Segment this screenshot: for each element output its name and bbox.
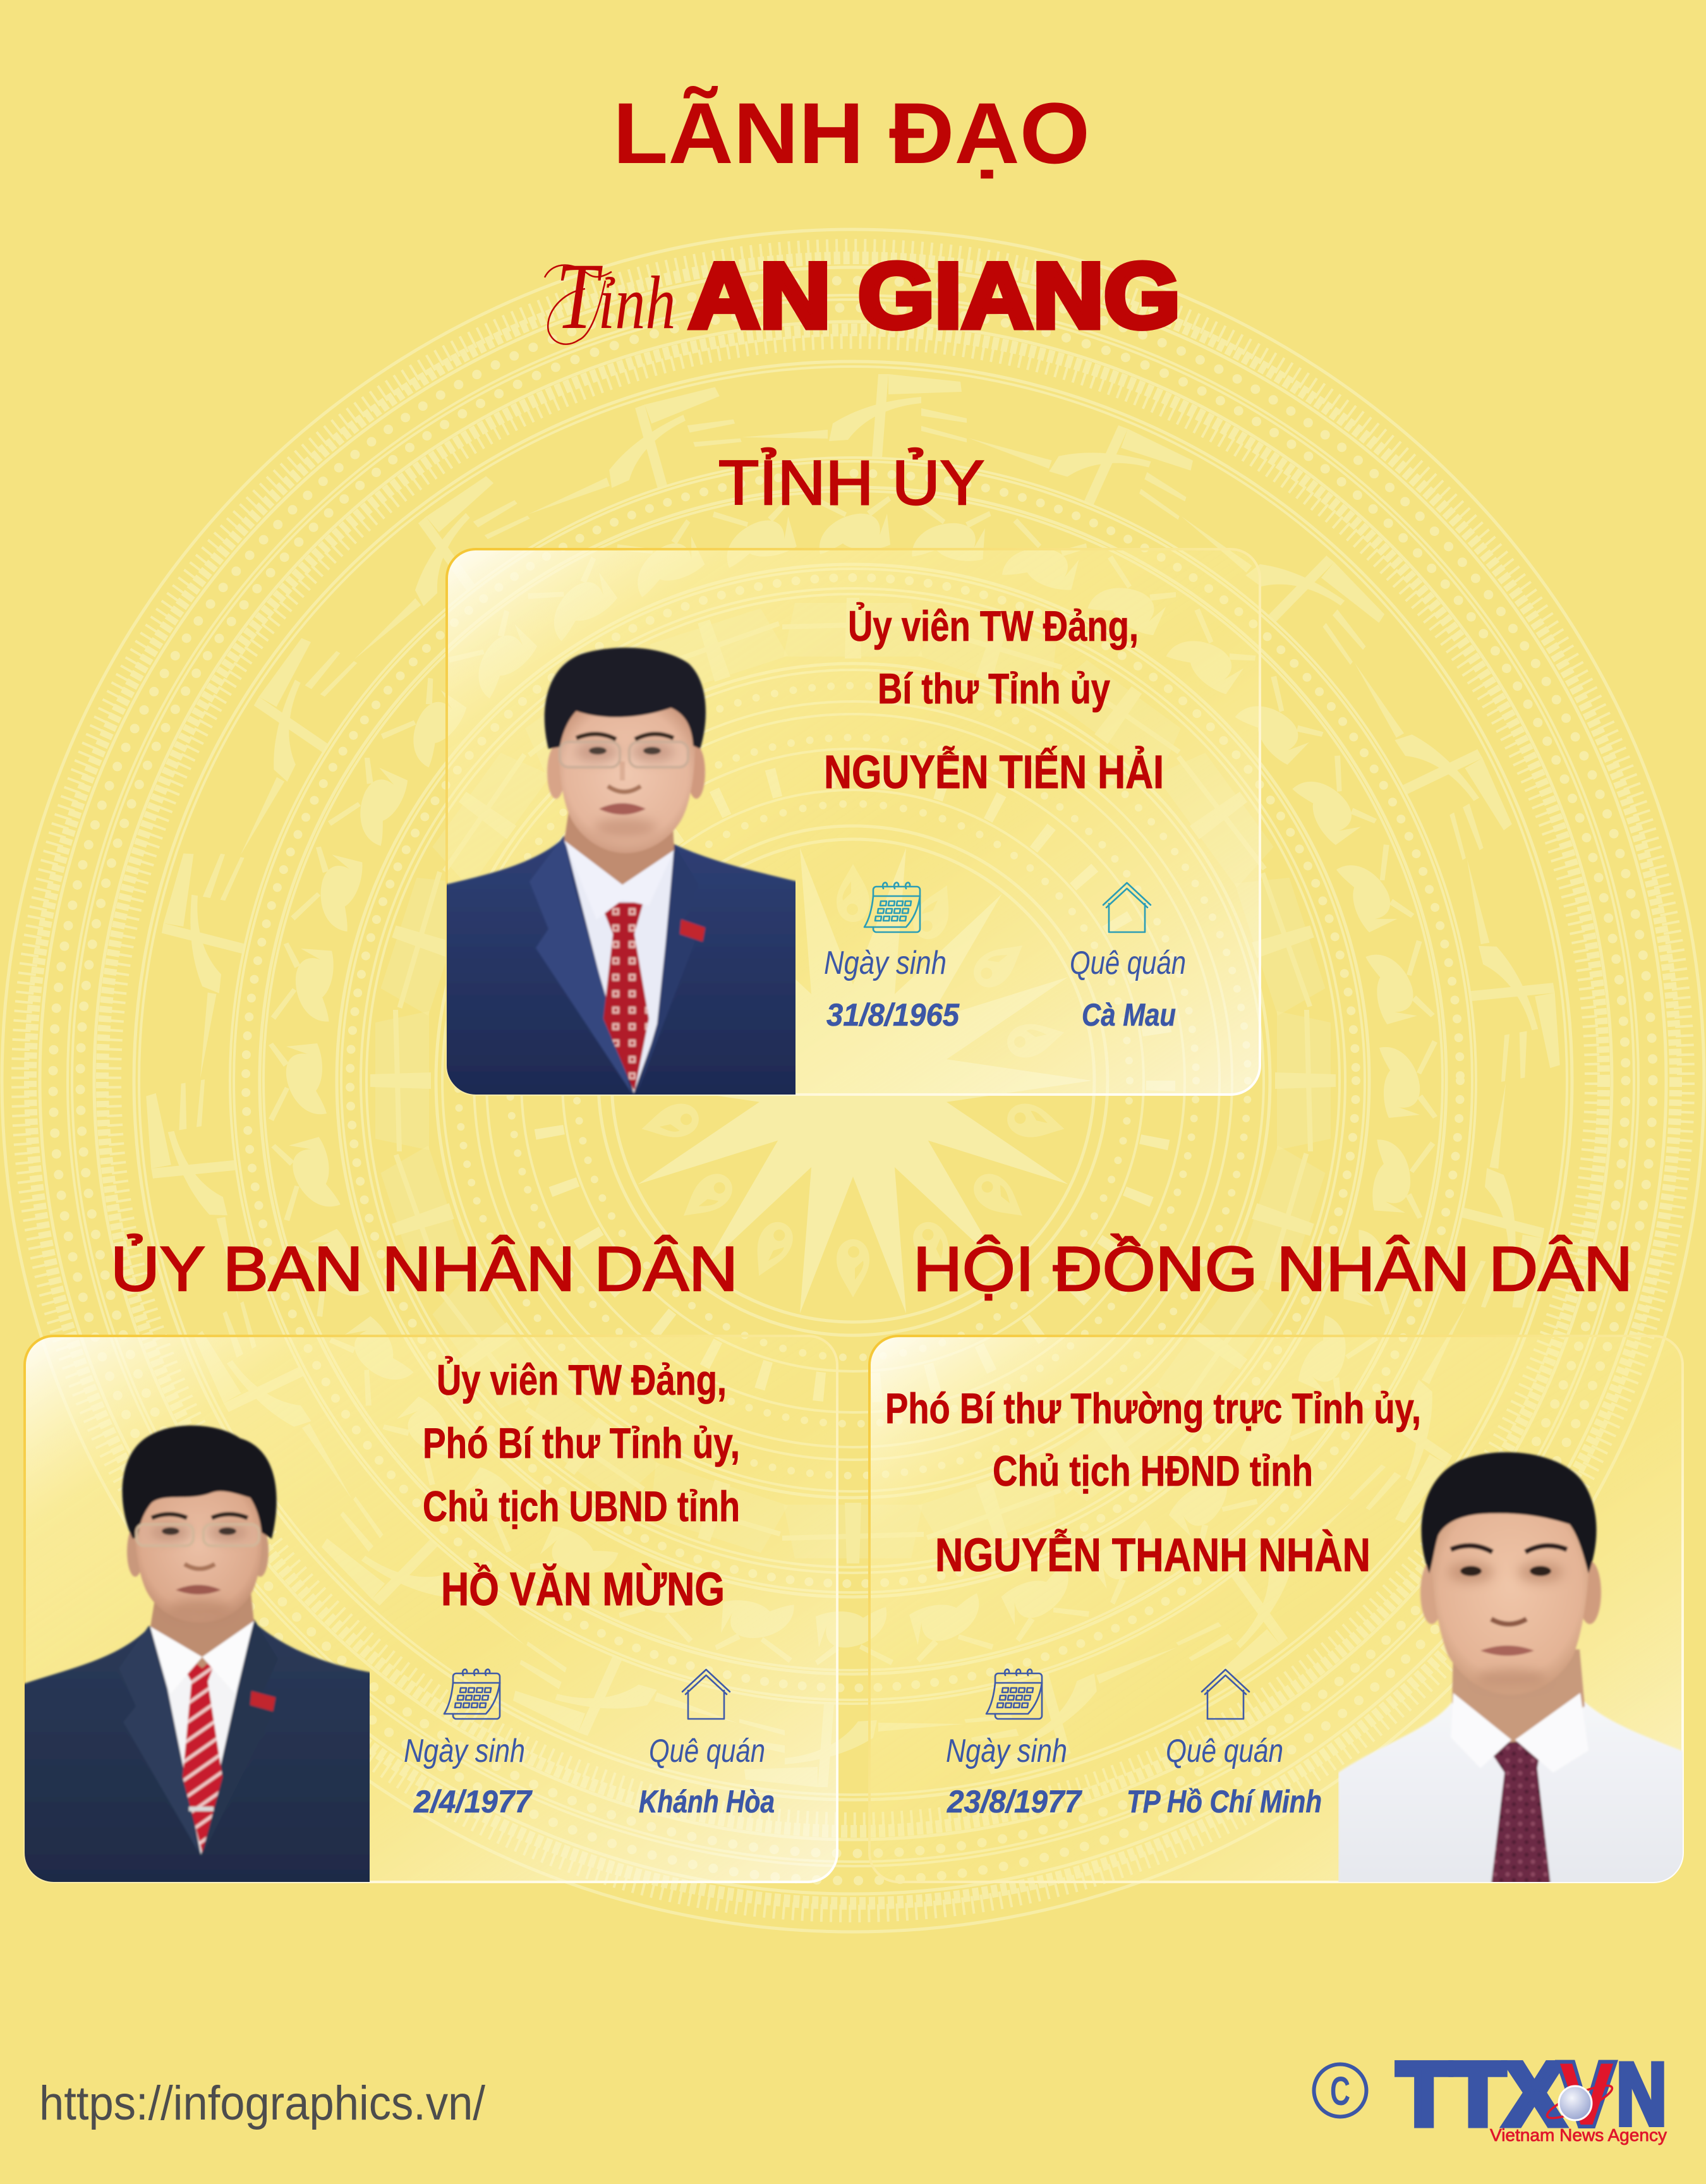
portrait: Nguyễn Tiến Hải — [445, 648, 797, 1097]
hometown: Khánh Hòa — [639, 1784, 775, 1819]
title: Tỉnh AN GIANG — [545, 244, 1180, 349]
icon: calendar — [864, 883, 920, 932]
card background — [25, 1336, 837, 1882]
footer url: https://infographics.vn/ — [39, 2077, 486, 2130]
icon: copyright — [1314, 2064, 1366, 2117]
icon: house — [1202, 1670, 1249, 1719]
hometown: TP Hồ Chí Minh — [1127, 1784, 1322, 1819]
heading: HỘI ĐỒNG NHÂN DÂN: HỘI ĐỒNG NHÂN DÂN — [913, 1234, 1633, 1304]
icon: house — [682, 1670, 730, 1719]
icon: copyright: C — [1330, 2068, 1350, 2114]
birth date: Ngày sinh — [824, 945, 947, 981]
role text — [423, 1356, 740, 1531]
birth date — [824, 945, 960, 1033]
birth date: 31/8/1965 — [826, 997, 960, 1033]
name: NGUYỄN TIẾN HẢI — [824, 746, 1164, 798]
icon: calendar — [986, 1670, 1042, 1719]
role text: Chủ tịch UBND tỉnh — [423, 1483, 740, 1531]
role text: Ủy viên TW Đảng, — [437, 1356, 727, 1404]
role text: Ủy viên TW Đảng, — [848, 602, 1139, 650]
birth date: 23/8/1977 — [947, 1784, 1082, 1819]
portrait: Hồ Văn Mừng — [23, 1426, 373, 1884]
portrait: Nguyễn Thanh Nhàn — [1338, 1452, 1685, 1884]
bronze drum pattern background — [2, 229, 1704, 1932]
card background — [869, 1336, 1683, 1882]
role text: Chủ tịch HĐND tỉnh — [993, 1447, 1313, 1495]
role text: Phó Bí thư Tỉnh ủy, — [423, 1419, 740, 1467]
heavy word: AN GIANG: AN GIANG — [689, 244, 1180, 347]
birth date: Ngày sinh — [946, 1733, 1067, 1769]
birth date — [404, 1733, 533, 1819]
hometown: Quê quán — [1070, 945, 1186, 981]
panel: UBND card — [23, 1336, 837, 1884]
icon: calendar — [444, 1670, 500, 1719]
heading: TỈNH ỦY: TỈNH ỦY — [718, 447, 984, 518]
card background — [447, 549, 1260, 1095]
logo: TTXVN — [1397, 2044, 1667, 2145]
hometown: Quê quán — [1166, 1733, 1283, 1769]
hometown — [1127, 1733, 1322, 1819]
logo: TTXVN: Vietnam News Agency — [1490, 2125, 1667, 2145]
logo: TTXVN: TTX — [1397, 2044, 1564, 2144]
role text: Phó Bí thư Thường trực Tỉnh ủy, — [885, 1385, 1421, 1433]
heading: ỦY BAN NHÂN DÂN: ỦY BAN NHÂN DÂN — [111, 1234, 738, 1304]
name: NGUYỄN THANH NHÀN — [935, 1529, 1370, 1581]
hometown: Quê quán — [649, 1733, 765, 1769]
birth date — [946, 1733, 1082, 1819]
hometown — [1070, 945, 1186, 1033]
title: LÃNH ĐẠO: LÃNH ĐẠO — [613, 85, 1090, 182]
script word: Tỉnh: Tỉnh — [556, 244, 675, 349]
birth date: Ngày sinh — [404, 1733, 525, 1769]
panel: HĐND card — [869, 1336, 1685, 1884]
icon: house — [1103, 883, 1151, 932]
hometown — [639, 1733, 775, 1819]
role text — [885, 1385, 1421, 1495]
birth date: 2/4/1977 — [413, 1784, 533, 1819]
role text — [848, 602, 1139, 713]
role text: Bí thư Tỉnh ủy — [878, 665, 1110, 713]
name: HỒ VĂN MỪNG — [441, 1563, 725, 1615]
logo: TTXVN: N — [1616, 2044, 1667, 2144]
hometown: Cà Mau — [1082, 997, 1176, 1033]
panel: Tỉnh ủy card — [445, 549, 1260, 1097]
logo: TTXVN: V — [1559, 2044, 1614, 2144]
